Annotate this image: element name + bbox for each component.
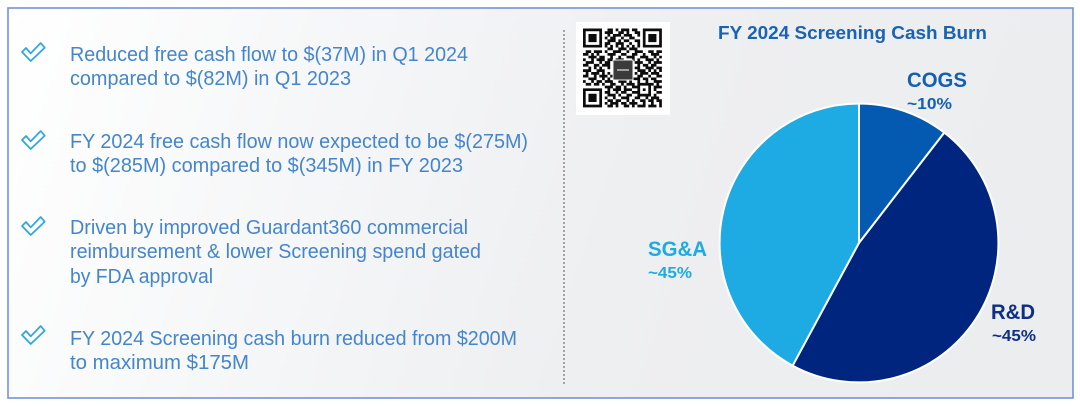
label: R&D xyxy=(991,300,1036,345)
text: bullet 1: Reduced free cash flow to $(37M) in Q1 2024 xyxy=(70,44,468,66)
text: bullet 2: to $(285M) compared to $(345M) in FY 2023 xyxy=(70,155,463,177)
text: bullet 1 xyxy=(70,44,468,90)
text: bullet 3 xyxy=(70,217,481,288)
text: bullet 3: by FDA approval xyxy=(70,266,213,288)
label: SG&A: SG&A xyxy=(648,237,707,261)
text: bullet 3: Driven by improved Guardant360 commercial xyxy=(70,217,468,239)
text: bullet 4 xyxy=(70,328,517,374)
slice: SG&A xyxy=(720,104,859,366)
label: SG&A: ~45% xyxy=(648,265,692,282)
bullet 4: screening cash burn xyxy=(22,326,517,374)
label: R&D: ~45% xyxy=(992,328,1036,345)
text: bullet 4: FY 2024 Screening cash burn reduced from $200M xyxy=(70,328,517,350)
icon: check mark 2 xyxy=(22,131,45,149)
slice: COGS xyxy=(859,104,944,243)
text: bullet 2 xyxy=(70,131,528,177)
icon: check mark 1 xyxy=(22,43,45,61)
text: bullet 1: compared to $(82M) in Q1 2023 xyxy=(70,68,351,90)
icon: check mark 4 xyxy=(22,326,45,344)
bullet 2: free cash flow FY xyxy=(22,131,528,177)
label: COGS xyxy=(907,68,967,113)
label: R&D: R&D xyxy=(991,300,1035,324)
text: bullet 3: reimbursement & lower Screening spend gated xyxy=(70,241,481,263)
text: bullet 2: FY 2024 free cash flow now expected to be $(275M) xyxy=(70,131,528,153)
label: SG&A xyxy=(648,237,707,282)
icon: QR code xyxy=(576,22,670,115)
label: COGS: ~10% xyxy=(907,96,952,113)
bullet 3: drivers xyxy=(22,217,481,288)
pie chart xyxy=(720,104,998,382)
slice: R&D xyxy=(793,133,998,382)
bullet 1: free cash flow Q1 xyxy=(22,43,468,90)
panel: key points xyxy=(22,43,528,374)
icon: check mark 3 xyxy=(22,217,45,235)
title: FY 2024 Screening Cash Burn: FY 2024 Screening Cash Burn xyxy=(718,22,987,43)
label: COGS: COGS xyxy=(907,68,967,92)
text: bullet 4: to maximum $175M xyxy=(70,352,249,374)
